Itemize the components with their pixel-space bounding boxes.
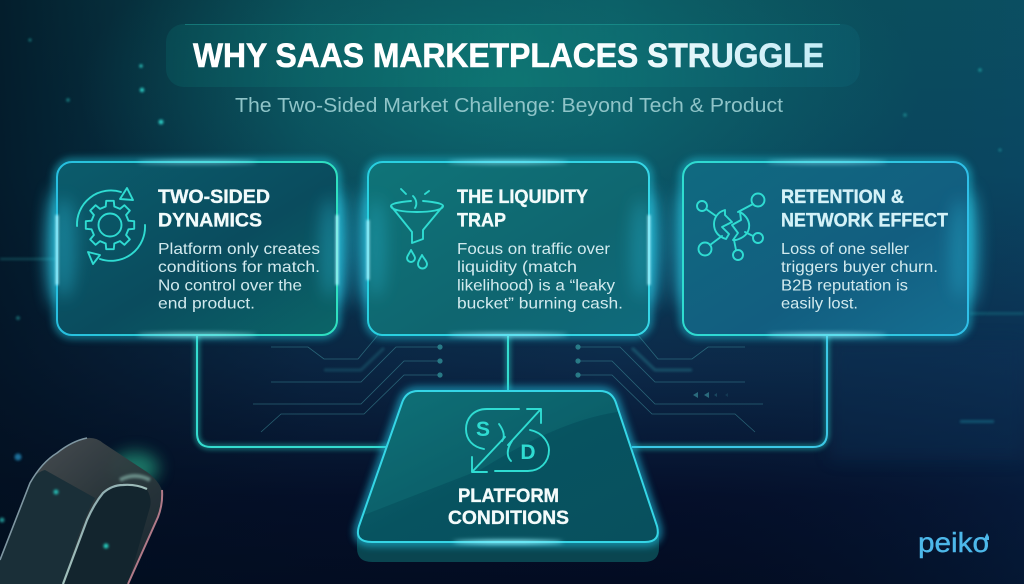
panel: the liquidity trap bbox=[357, 160, 660, 337]
heading: THE LIQUIDITY bbox=[457, 187, 588, 208]
title: WHY SAAS MARKETPLACES STRUGGLE bbox=[193, 37, 824, 75]
body text: easily lost. bbox=[781, 296, 858, 312]
platform label: PLATFORM bbox=[458, 486, 559, 507]
body text bbox=[781, 241, 938, 312]
body text bbox=[158, 241, 320, 312]
title banner bbox=[166, 24, 860, 87]
body text: conditions for match. bbox=[158, 259, 320, 276]
glass ring decoration bbox=[0, 438, 162, 584]
heading: TRAP bbox=[457, 210, 506, 232]
body text: Focus on traffic over bbox=[457, 241, 611, 258]
heading: DYNAMICS bbox=[158, 210, 262, 232]
body text: likelihood) is a “leaky bbox=[457, 278, 615, 294]
circuit traces bbox=[253, 335, 763, 432]
subtitle: The Two-Sided Market Challenge: Beyond Tech & Product bbox=[235, 95, 783, 117]
body text: liquidity (match bbox=[457, 259, 577, 276]
body text: B2B reputation is bbox=[781, 278, 908, 294]
body text: triggers buyer churn. bbox=[781, 259, 938, 276]
body text: Loss of one seller bbox=[781, 241, 910, 258]
body text: No control over the bbox=[158, 278, 302, 294]
connector lines bbox=[197, 335, 827, 447]
body text: bucket” burning cash. bbox=[457, 296, 623, 312]
body text: end product. bbox=[158, 296, 255, 312]
heading bbox=[781, 187, 948, 232]
heading bbox=[158, 187, 270, 232]
heading: RETENTION & bbox=[781, 187, 904, 208]
icon: broken network bbox=[697, 194, 764, 260]
icon letter D: D bbox=[520, 441, 536, 464]
platform label: CONDITIONS bbox=[448, 508, 569, 529]
body text bbox=[457, 241, 623, 312]
heading: NETWORK EFFECT bbox=[781, 210, 948, 232]
body text: Platform only creates bbox=[158, 241, 320, 258]
icon: supply and demand arrows bbox=[466, 409, 549, 472]
icon letter S: S bbox=[476, 418, 490, 441]
icon: leaky funnel bbox=[391, 189, 443, 268]
panel: platform conditions bbox=[357, 391, 659, 562]
logo: peiko: peiko bbox=[918, 527, 989, 558]
panel: retention and network effect bbox=[672, 160, 979, 337]
icon: gear with cycle arrows bbox=[77, 188, 145, 264]
heading bbox=[457, 187, 588, 232]
panel: two-sided dynamics bbox=[46, 160, 348, 337]
heading: TWO-SIDED bbox=[158, 187, 270, 208]
platform label bbox=[448, 486, 569, 529]
